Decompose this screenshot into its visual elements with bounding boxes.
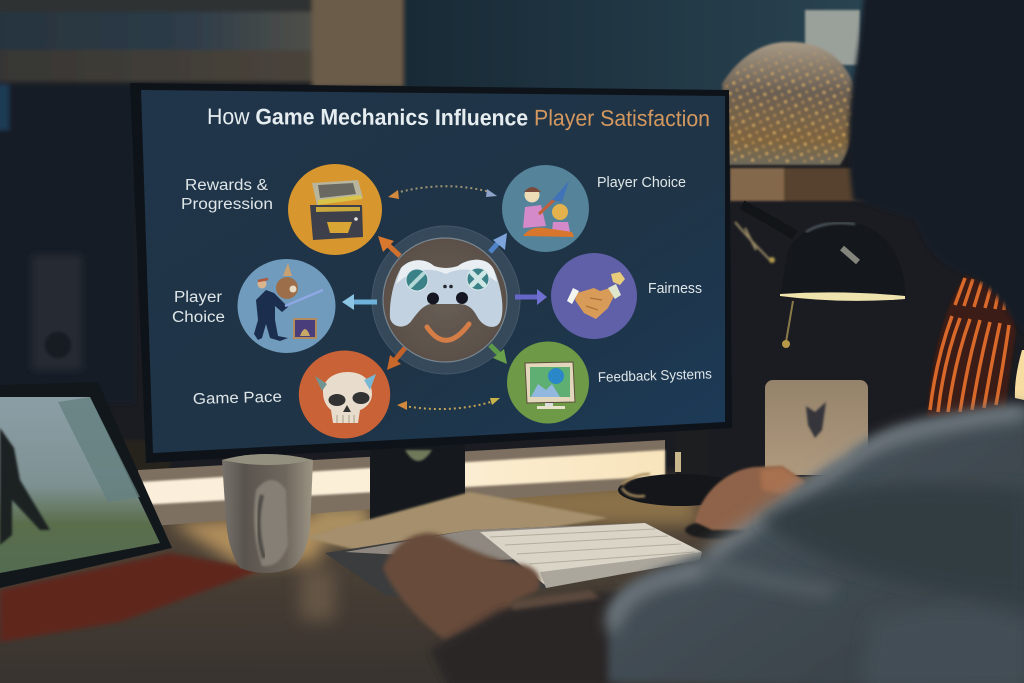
icon: computer monitor bbox=[525, 362, 575, 409]
arrow: to game pace bbox=[387, 348, 405, 370]
monitor stand bbox=[370, 440, 465, 546]
desk surface bbox=[0, 470, 1024, 683]
icon: game controller bbox=[390, 260, 502, 327]
monitor frame bbox=[130, 83, 732, 463]
icon: smile bbox=[427, 324, 469, 340]
keyboard bbox=[325, 523, 702, 600]
arrow: to player choice left bbox=[342, 294, 377, 310]
arrows from hub bbox=[342, 186, 547, 410]
label: player choice left: Player bbox=[174, 289, 222, 306]
paper on desk bbox=[305, 492, 608, 560]
arrow: to rewards bbox=[378, 236, 400, 256]
arrow: to feedback bbox=[490, 345, 507, 364]
icon: figure with sword bbox=[254, 263, 323, 341]
label: player choice right: Player Choice bbox=[597, 175, 686, 191]
node: player choice left bbox=[172, 259, 336, 353]
light strip backing bbox=[138, 440, 665, 527]
label: player choice left: Choice bbox=[172, 309, 225, 326]
person head silhouette bbox=[849, 0, 1024, 340]
title: How Game Mechanics Influence Player Satisfaction bbox=[207, 104, 710, 131]
right monitor stand and base bbox=[618, 428, 742, 506]
label: rewards and progression: Rewards & bbox=[185, 177, 269, 194]
glowing light strip behind monitor bbox=[140, 450, 665, 505]
desk lamp bbox=[742, 205, 906, 348]
decorative perforated orb lamp bbox=[722, 42, 858, 165]
hand on mouse bbox=[685, 466, 806, 539]
label: player choice left bbox=[172, 289, 225, 326]
node: player choice right bbox=[502, 165, 686, 252]
warm light pool on desk bbox=[170, 480, 700, 620]
person forearm shadow bbox=[430, 590, 620, 683]
tablet on desk bbox=[0, 382, 172, 588]
shadow under monitor bbox=[100, 440, 170, 510]
icon: handshake bbox=[567, 272, 625, 319]
icon: treasure chest bbox=[310, 180, 363, 240]
label: fairness: Fairness bbox=[648, 281, 702, 297]
node: fairness bbox=[551, 253, 702, 339]
label: feedback systems: Feedback Systems bbox=[598, 365, 712, 385]
icon: two figures bbox=[523, 181, 574, 237]
warm skin glow below keyboard bbox=[512, 590, 600, 610]
red folio under tablet bbox=[0, 553, 262, 642]
panel: central controller hub bbox=[372, 226, 520, 374]
orange table lamp shade bbox=[927, 275, 1024, 418]
arrow: to player choice right bbox=[490, 233, 507, 252]
person sweater bbox=[608, 405, 1024, 683]
dashed arc: bottom bbox=[397, 398, 500, 410]
dashed arc: top bbox=[388, 186, 497, 199]
foliage beside desk lamp bbox=[735, 222, 775, 263]
wooden block on desk bbox=[765, 380, 868, 475]
node: feedback systems bbox=[507, 342, 712, 424]
hand on keyboard bbox=[383, 533, 540, 640]
monitor screen bbox=[141, 90, 725, 453]
label: rewards and progression bbox=[181, 177, 273, 213]
wall shelf bbox=[730, 168, 870, 201]
label: rewards and progression: Progression bbox=[181, 196, 273, 213]
icon: skull bbox=[315, 372, 376, 423]
label: game pace: Game Pace bbox=[193, 389, 282, 408]
node: game pace bbox=[193, 350, 390, 438]
arrow: to fairness bbox=[515, 289, 547, 305]
coffee mug bbox=[222, 454, 313, 573]
node: rewards and progression bbox=[181, 164, 382, 255]
